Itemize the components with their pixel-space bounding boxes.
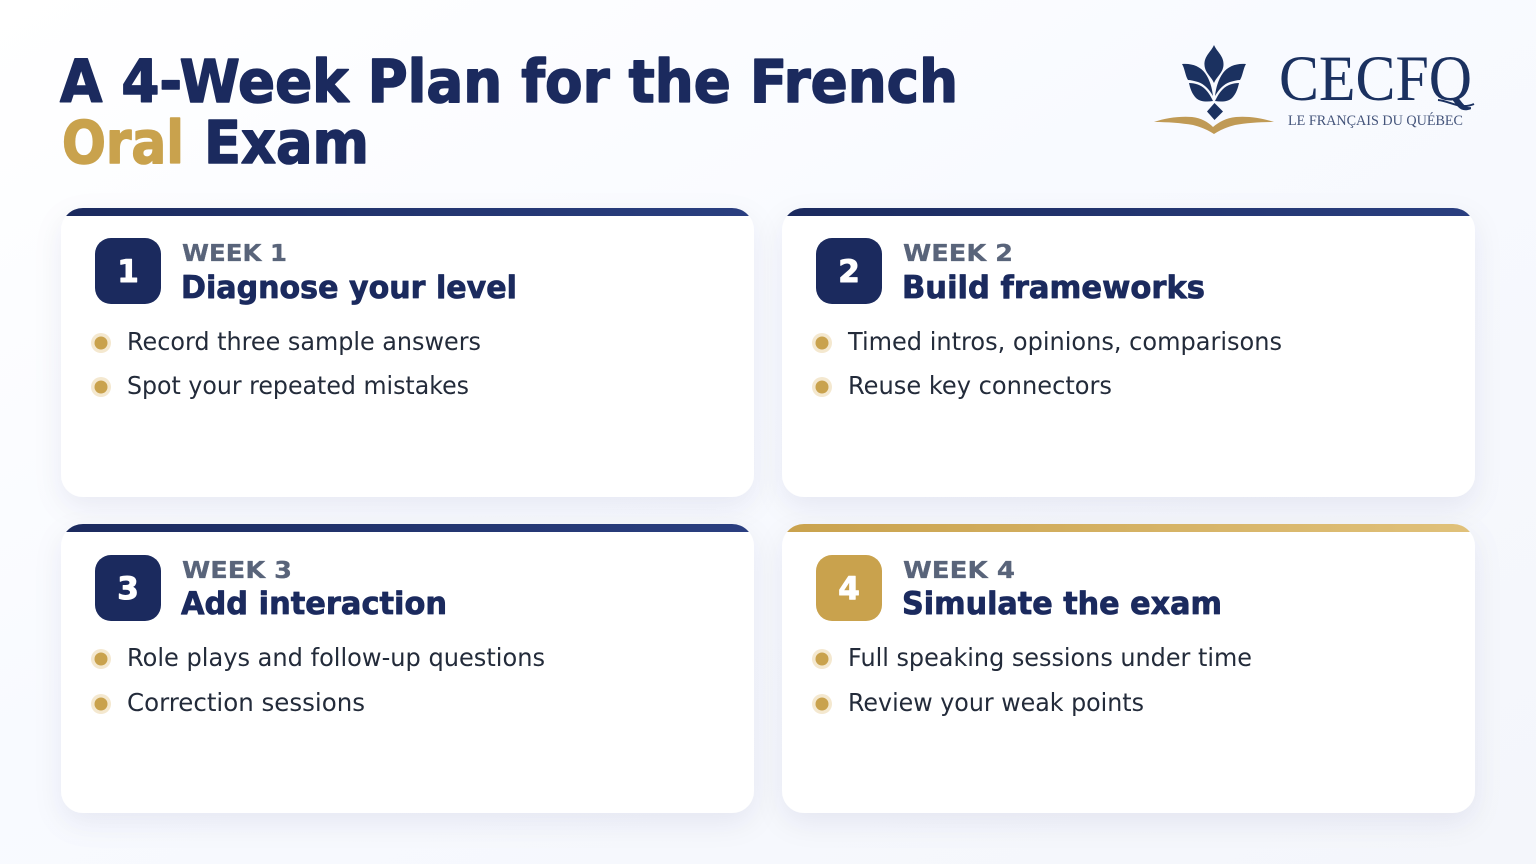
title: Exam [204,108,369,177]
badge: number 1 [95,238,161,304]
bullet list [91,327,481,400]
card heading: Build frameworks [902,270,1205,306]
bullet list: Full speaking sessions under time [848,643,1252,672]
bullet list: Spot your repeated mistakes [127,371,469,400]
week label: WEEK 3 [182,558,292,584]
bullet list: Reuse key connectors [848,371,1112,400]
bullet list: Role plays and follow-up questions [127,643,545,672]
logo: CECFQ [1154,43,1474,134]
logo tagline: LE FRANÇAIS DU QUÉBEC [1288,112,1463,129]
badge: number 4 [816,555,882,621]
bullet list: Review your weak points [848,688,1144,717]
title [60,47,958,177]
badge: number 1: 1 [117,254,139,290]
panel: week 4 [782,524,1475,813]
bullet list [812,643,1252,717]
card heading: Simulate the exam [902,586,1222,622]
badge: number 3: 3 [117,571,139,607]
bullet list: Record three sample answers [127,327,481,356]
bullet list [812,327,1282,400]
badge: number 2 [816,238,882,304]
week label: WEEK 1 [182,241,287,267]
bullet list: Correction sessions [127,688,365,717]
bullet list: Timed intros, opinions, comparisons [847,327,1282,356]
panel: week 3 [61,524,754,813]
card heading: Diagnose your level [181,270,517,306]
badge: number 4: 4 [838,571,860,607]
title: Oral [62,108,184,177]
logo wordmark: CECFQ [1279,43,1472,115]
panel: week 2 [782,208,1475,497]
icon: fleur-de-lis over open book [1154,45,1274,134]
bullet list [91,643,545,717]
panel: week 1 [61,208,754,497]
week label: WEEK 4 [903,558,1015,584]
card heading: Add interaction [181,586,447,622]
badge: number 3 [95,555,161,621]
badge: number 2: 2 [838,254,860,290]
title: A 4-Week Plan for the French [60,47,958,116]
week label: WEEK 2 [903,241,1013,267]
